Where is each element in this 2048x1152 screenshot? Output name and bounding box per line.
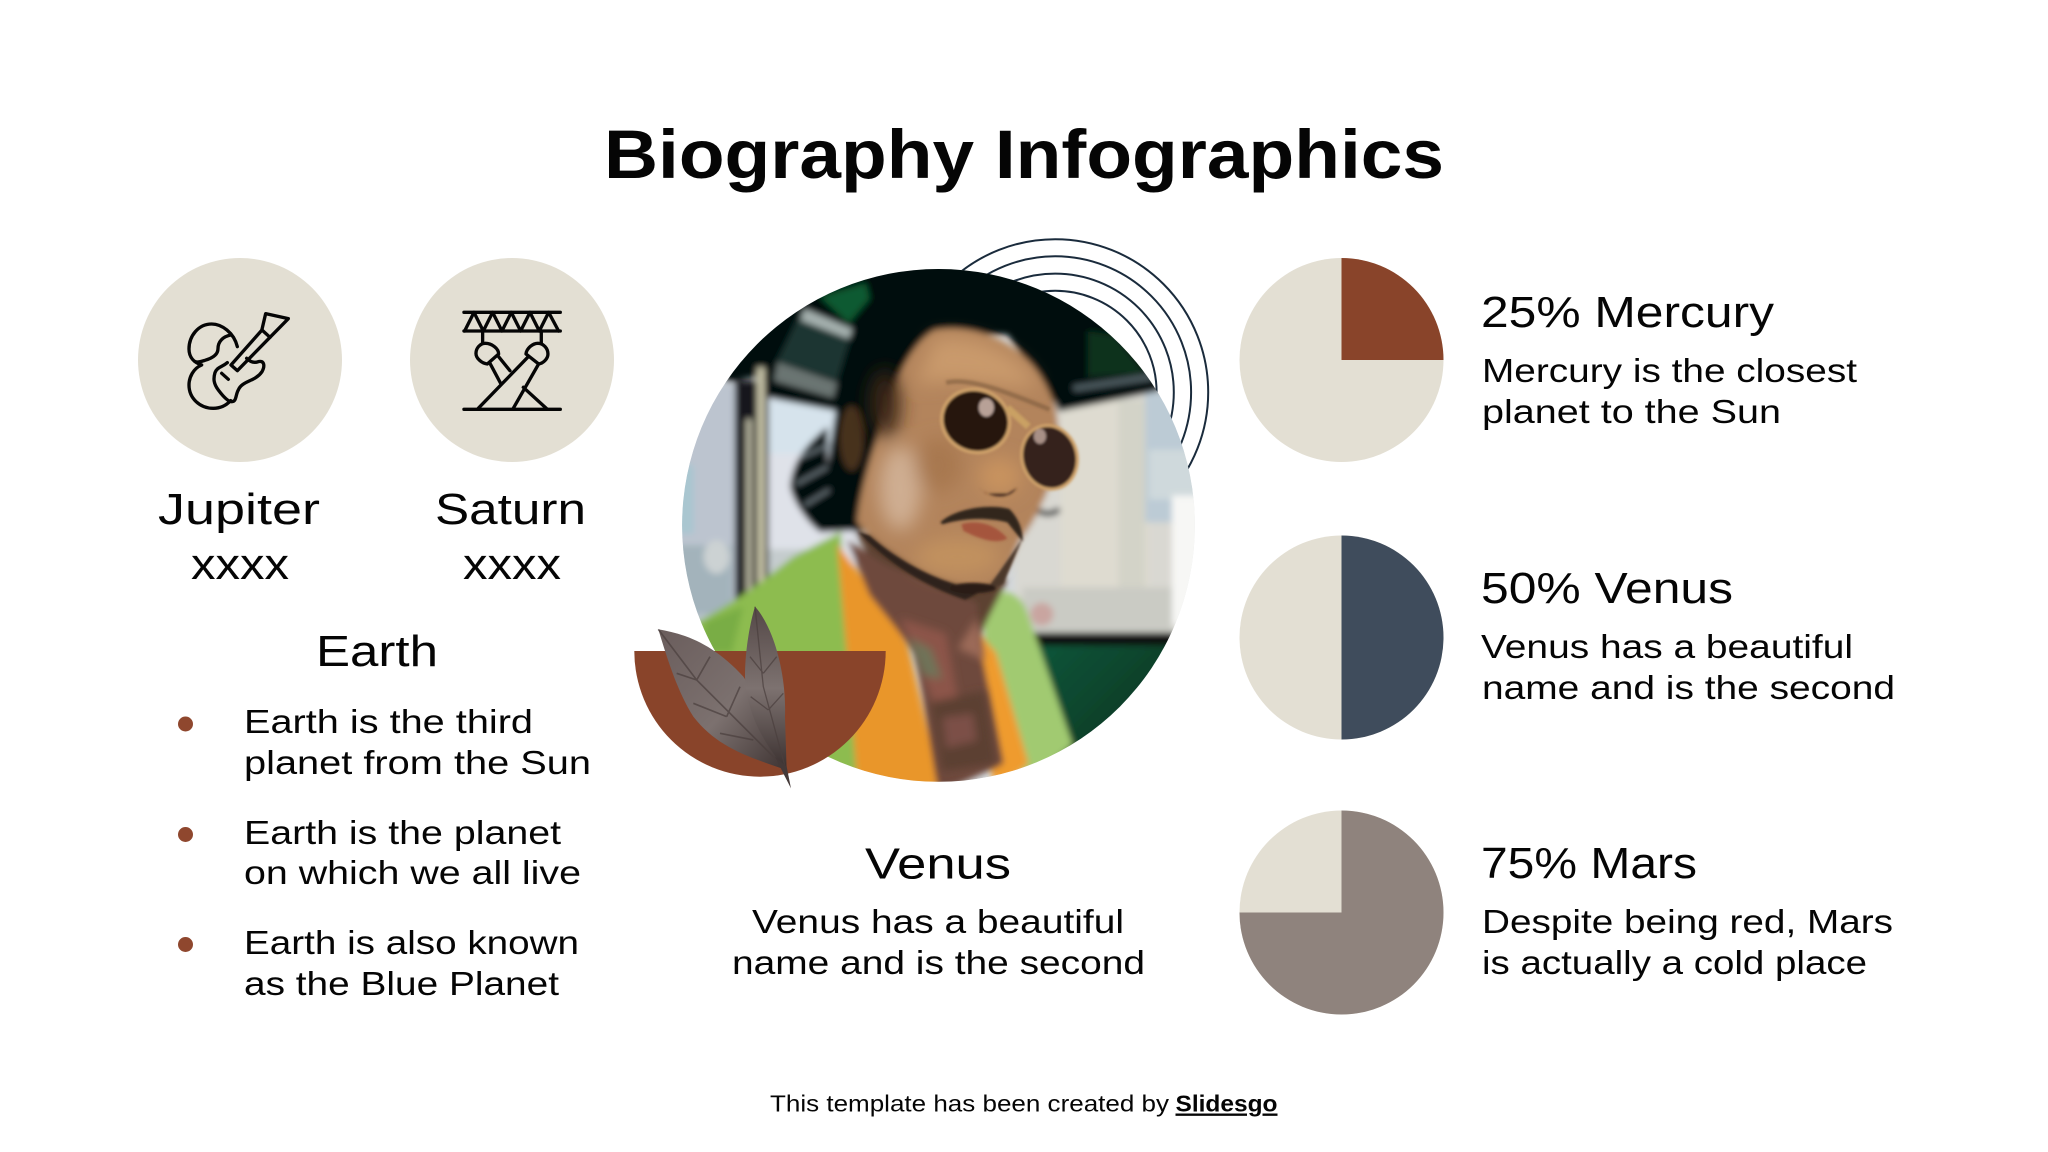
window poles (735, 381, 769, 626)
bullet 1 (178, 704, 591, 782)
scarf pattern (900, 618, 996, 771)
heading: Venus: Venus (865, 840, 1011, 888)
ear (839, 406, 864, 471)
heading: Earth: Earth (316, 627, 438, 676)
lips (961, 522, 1007, 541)
soft face shading (870, 338, 1038, 576)
green coat (699, 524, 861, 770)
title: Biography Infographics (604, 116, 1444, 193)
orange lapels (837, 543, 942, 794)
bullet 2 (178, 815, 581, 892)
icon circle: Jupiter (138, 258, 342, 462)
neck (854, 530, 1007, 641)
nose shadow (979, 488, 1017, 497)
decorative concentric rings (902, 239, 1208, 545)
footer credit: This template has been created by (770, 1090, 1169, 1116)
panel: Earth list (178, 627, 591, 1003)
left window (674, 385, 740, 622)
heading: 75% Mars: 75% Mars (1481, 839, 1697, 888)
leaf right (745, 607, 791, 788)
brown half circle (634, 651, 886, 777)
jaw shadow (858, 532, 986, 600)
description (1481, 629, 1895, 707)
bullet 3: as the Blue Planet (244, 966, 560, 1003)
heading: 50% Venus: 50% Venus (1481, 564, 1733, 613)
seat (1034, 633, 1180, 646)
label: xxxx: xxxx (463, 540, 561, 589)
label: xxxx: xxxx (191, 540, 289, 589)
goatee (950, 583, 996, 594)
description: name and is the second (732, 945, 1145, 982)
description: planet to the Sun (1482, 394, 1781, 431)
pie chart 25% (1240, 258, 1444, 462)
icon: guitars (189, 314, 288, 408)
face (857, 329, 1058, 589)
bullet 3 (178, 925, 579, 1003)
icon: stage lights (464, 312, 560, 409)
eyebrow (946, 381, 1049, 409)
label: Saturn: Saturn (435, 485, 586, 534)
sunglasses (939, 387, 1080, 492)
bullet 1: Earth is the third (244, 704, 533, 741)
panel: Jupiter (138, 258, 342, 589)
right window (1015, 388, 1206, 641)
description (732, 904, 1145, 982)
hair (786, 322, 1074, 537)
pie chart 75% (1240, 810, 1444, 1014)
description: Venus has a beautiful (1481, 629, 1853, 666)
panel: Venus (732, 840, 1145, 982)
heading: 25% Mercury: 25% Mercury (1481, 288, 1774, 337)
panel: Mercury stat (1240, 258, 1858, 462)
description: Despite being red, Mars (1482, 904, 1893, 941)
icon circle: Saturn (410, 258, 614, 462)
panel: Mars stat (1240, 810, 1893, 1014)
label: Jupiter: Jupiter (158, 485, 320, 534)
bullet 1: planet from the Sun (244, 745, 591, 782)
mustache (940, 507, 1023, 541)
leaf left (658, 629, 787, 770)
bullet 2: on which we all live (244, 855, 581, 892)
description: name and is the second (1482, 670, 1895, 707)
bullet 2: Earth is the planet (244, 815, 562, 852)
pie chart 50% (1240, 536, 1444, 740)
description: Mercury is the closest (1482, 353, 1858, 390)
portrait photo (674, 220, 1214, 794)
leaves (658, 607, 791, 788)
description: is actually a cold place (1482, 945, 1867, 982)
description (1482, 353, 1858, 431)
description (1482, 904, 1893, 982)
panel: Saturn (410, 258, 614, 589)
bullet 3: Earth is also known (244, 925, 579, 962)
description: Venus has a beautiful (752, 904, 1124, 941)
footer credit: Slidesgo (1176, 1090, 1278, 1116)
scarf (847, 540, 1004, 794)
ceiling (724, 269, 1159, 415)
panel: Venus stat (1240, 536, 1895, 740)
